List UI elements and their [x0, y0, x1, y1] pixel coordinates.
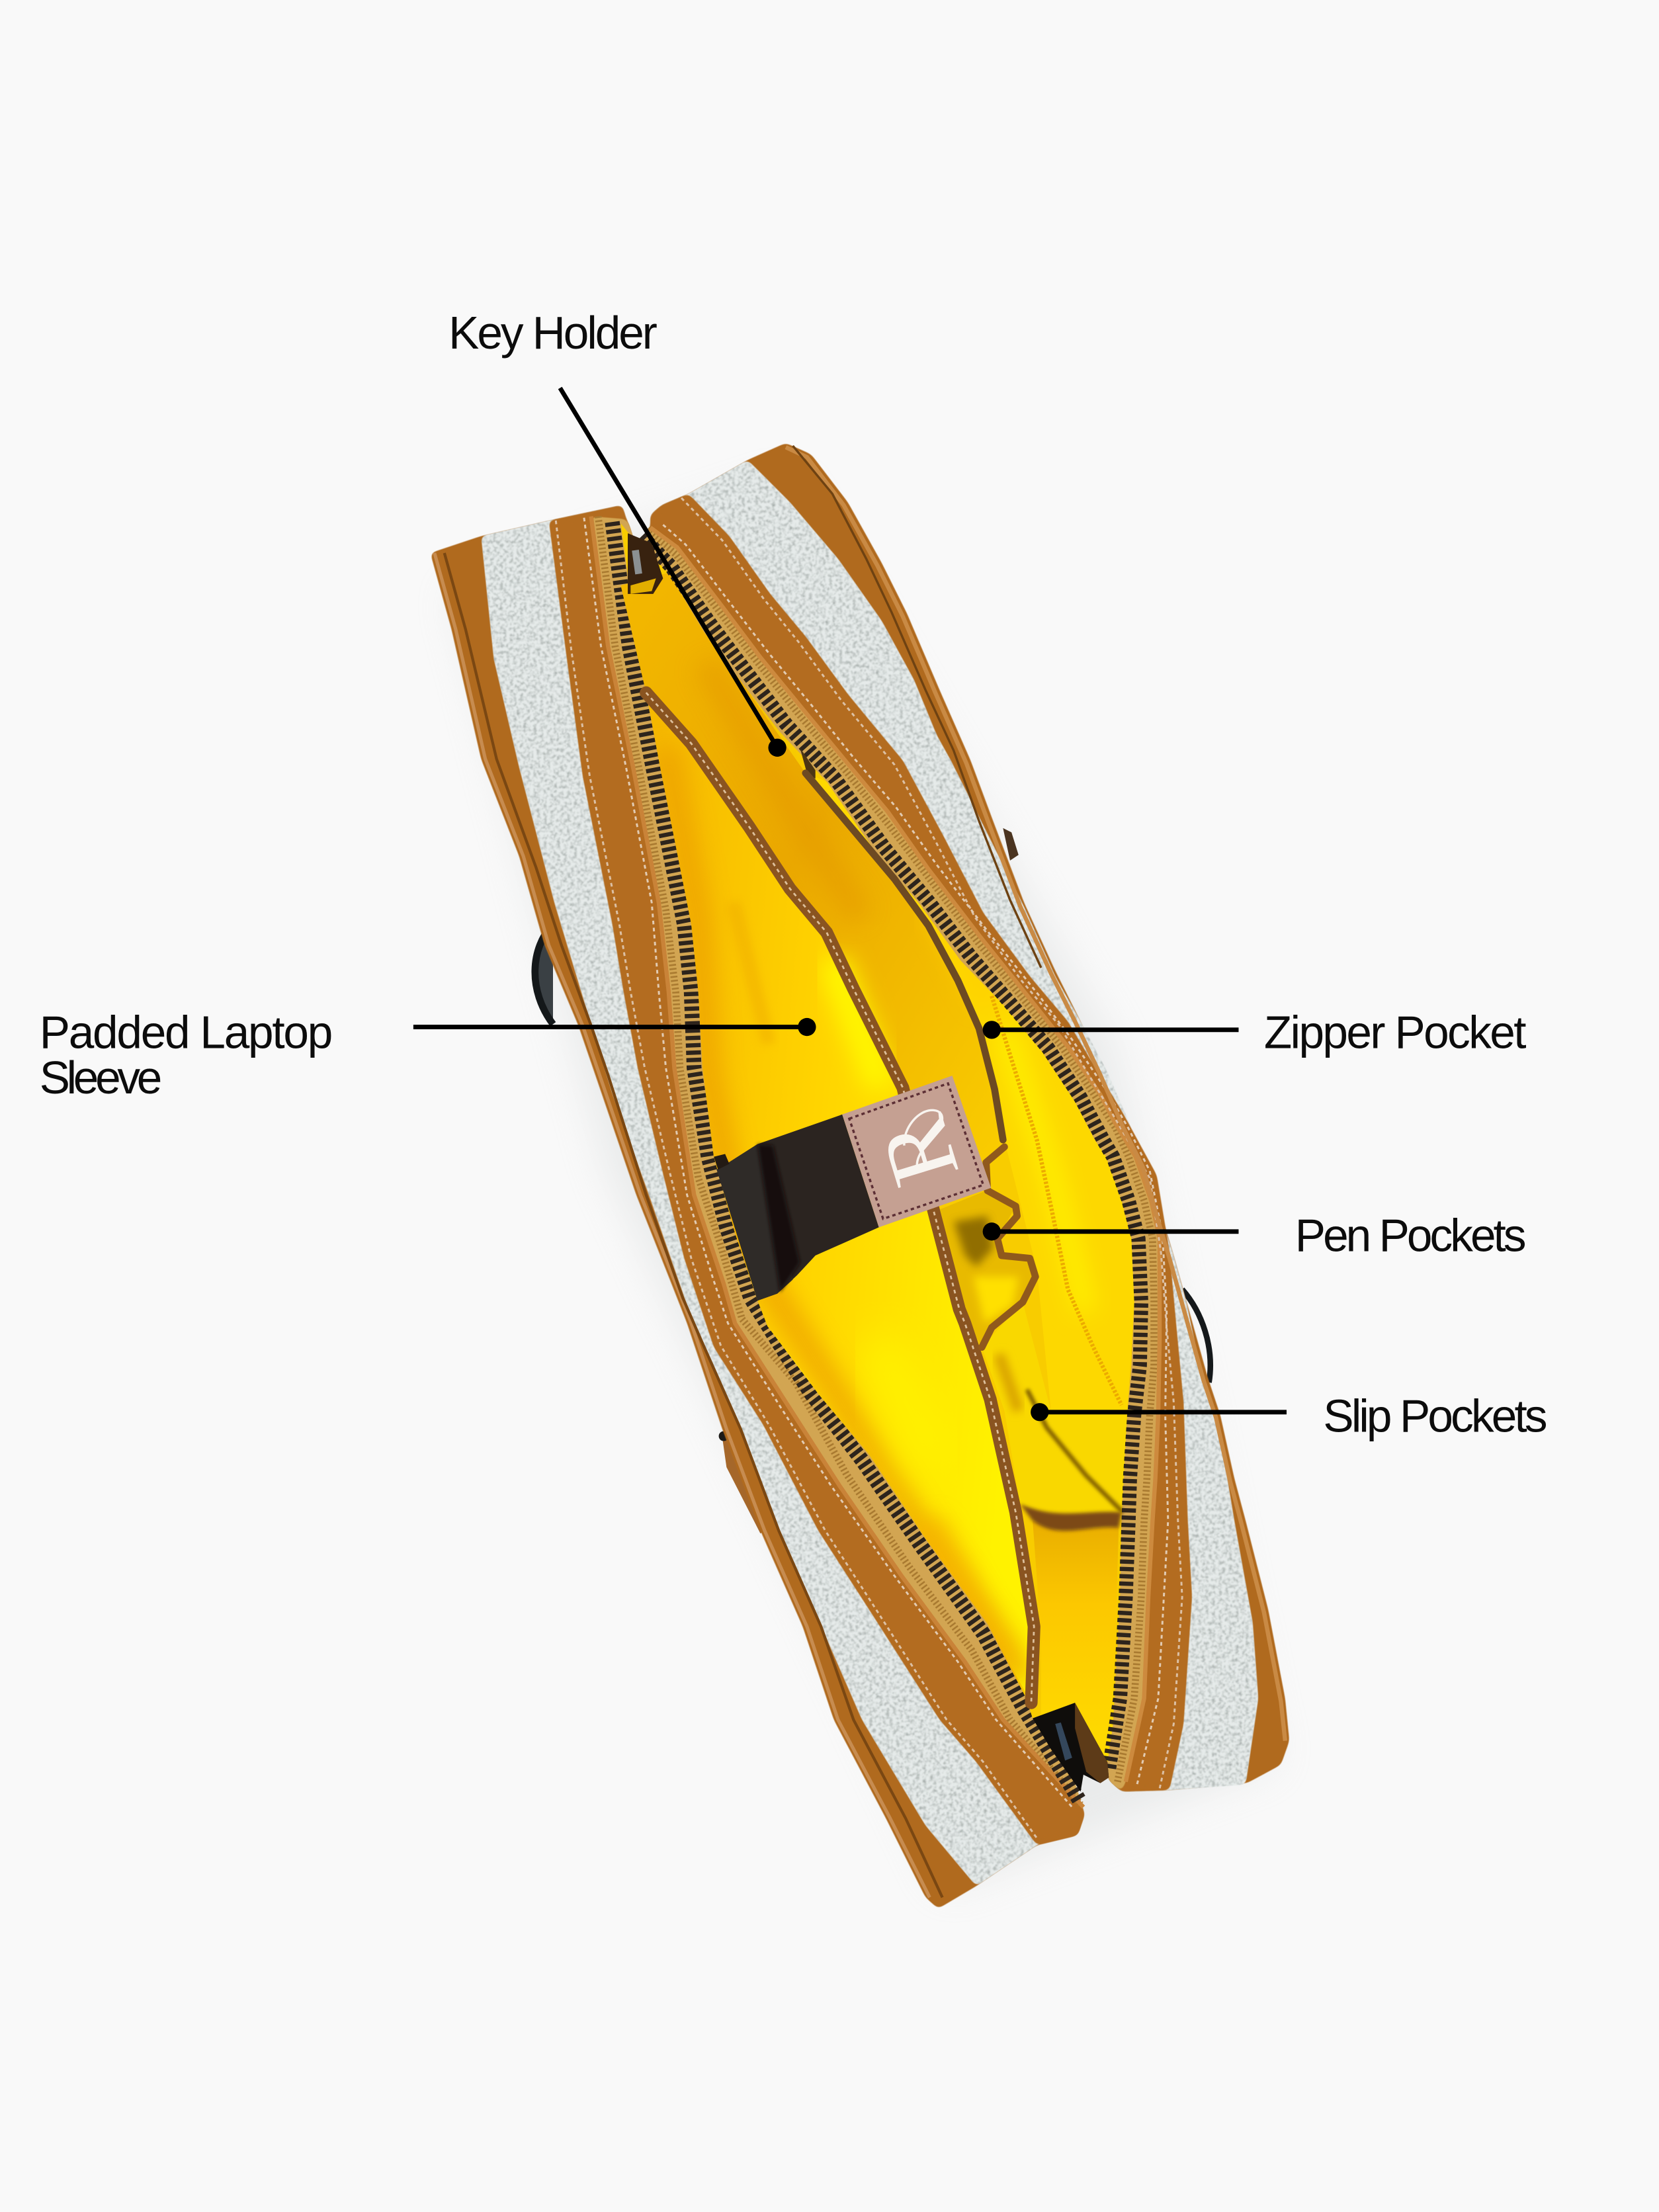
pen pocket ruffle	[982, 1147, 1035, 1347]
leather brand patch	[842, 1076, 991, 1227]
left outer rim	[435, 553, 929, 1897]
zipper pocket piping	[806, 773, 1003, 1140]
left zipper tape	[591, 517, 1084, 1807]
callout: slip pockets: Slip Pockets	[1323, 1390, 1548, 1442]
callout: slip pockets	[1031, 1390, 1548, 1442]
right panel of the bag	[642, 443, 1289, 1791]
strap knob	[714, 1154, 730, 1170]
left rim seam	[445, 553, 943, 1897]
brand initial: R	[859, 1105, 980, 1197]
right woven fabric band	[642, 460, 1258, 1791]
callout: padded laptop sleeve: Padded Laptop	[40, 1007, 333, 1058]
right rim seam	[793, 446, 1041, 968]
callout: key holder: Key Holder	[448, 307, 658, 359]
callout: zipper pocket: Zipper Pocket	[1264, 1007, 1527, 1058]
right stitching inner	[663, 525, 1168, 1785]
key holder zipper pull	[800, 747, 816, 779]
open bag illustration	[430, 443, 1289, 1908]
infographic canvas	[41, 315, 1546, 1908]
callout: padded laptop sleeve	[40, 1007, 816, 1103]
pen pocket area	[934, 1191, 1035, 1347]
interior lining	[620, 523, 1134, 1762]
pen pocket lit fabric	[974, 1277, 1019, 1323]
padded sleeve panel	[646, 693, 1034, 1703]
left zipper tape weave	[598, 517, 1081, 1805]
callout: pen pockets	[983, 1210, 1527, 1261]
left stitching outer	[556, 521, 1037, 1838]
callout: pen pockets: Pen Pockets	[1295, 1210, 1527, 1261]
patch stitching	[849, 1084, 983, 1219]
strap fold shadow	[757, 1144, 800, 1293]
right leather piping	[650, 528, 1160, 1782]
callout: padded laptop sleeve: Sleeve	[40, 1052, 162, 1103]
left zipper teeth	[613, 522, 1079, 1800]
right stitching outer	[681, 498, 1182, 1789]
right leather shell	[642, 443, 1289, 1791]
left leather shell	[430, 505, 1085, 1908]
soft bag shadow	[451, 480, 1277, 1891]
left inner leather band	[549, 505, 1085, 1846]
hardware behind the bag: rings and strap tabs	[535, 828, 1211, 1533]
slip pocket edge	[1020, 1504, 1121, 1531]
right zipper teeth	[642, 536, 1141, 1770]
pen pocket shadow	[954, 1216, 993, 1267]
callout: zipper pocket	[983, 1007, 1527, 1058]
slip pocket	[982, 1302, 1127, 1521]
right zipper tape weave	[648, 529, 1154, 1783]
sleeve divider piping	[646, 693, 1034, 1703]
left panel of the bag	[430, 505, 1085, 1908]
inner zip seam	[992, 996, 1121, 1405]
left leather piping	[591, 517, 1084, 1807]
zipper pocket panel	[806, 773, 1134, 1415]
left stitching inner	[584, 518, 1072, 1807]
right zipper tape	[642, 528, 1160, 1791]
left woven fabric band	[481, 505, 1085, 1886]
webbing strap	[714, 1115, 879, 1300]
callout: key holder	[448, 307, 787, 757]
lining shading	[666, 663, 1086, 1679]
back wall golden area	[620, 573, 1004, 1212]
slip pocket folds	[1027, 1390, 1123, 1512]
right outer rim	[786, 447, 1285, 1741]
brand swash	[904, 1110, 942, 1166]
bottom zipper hardware	[1033, 1703, 1109, 1791]
strap folded end	[716, 1144, 793, 1300]
sleeve divider stitching	[646, 693, 1034, 1703]
right inner leather band	[642, 493, 1192, 1791]
lower pocket	[1033, 1521, 1119, 1762]
top zipper hardware	[628, 533, 663, 594]
